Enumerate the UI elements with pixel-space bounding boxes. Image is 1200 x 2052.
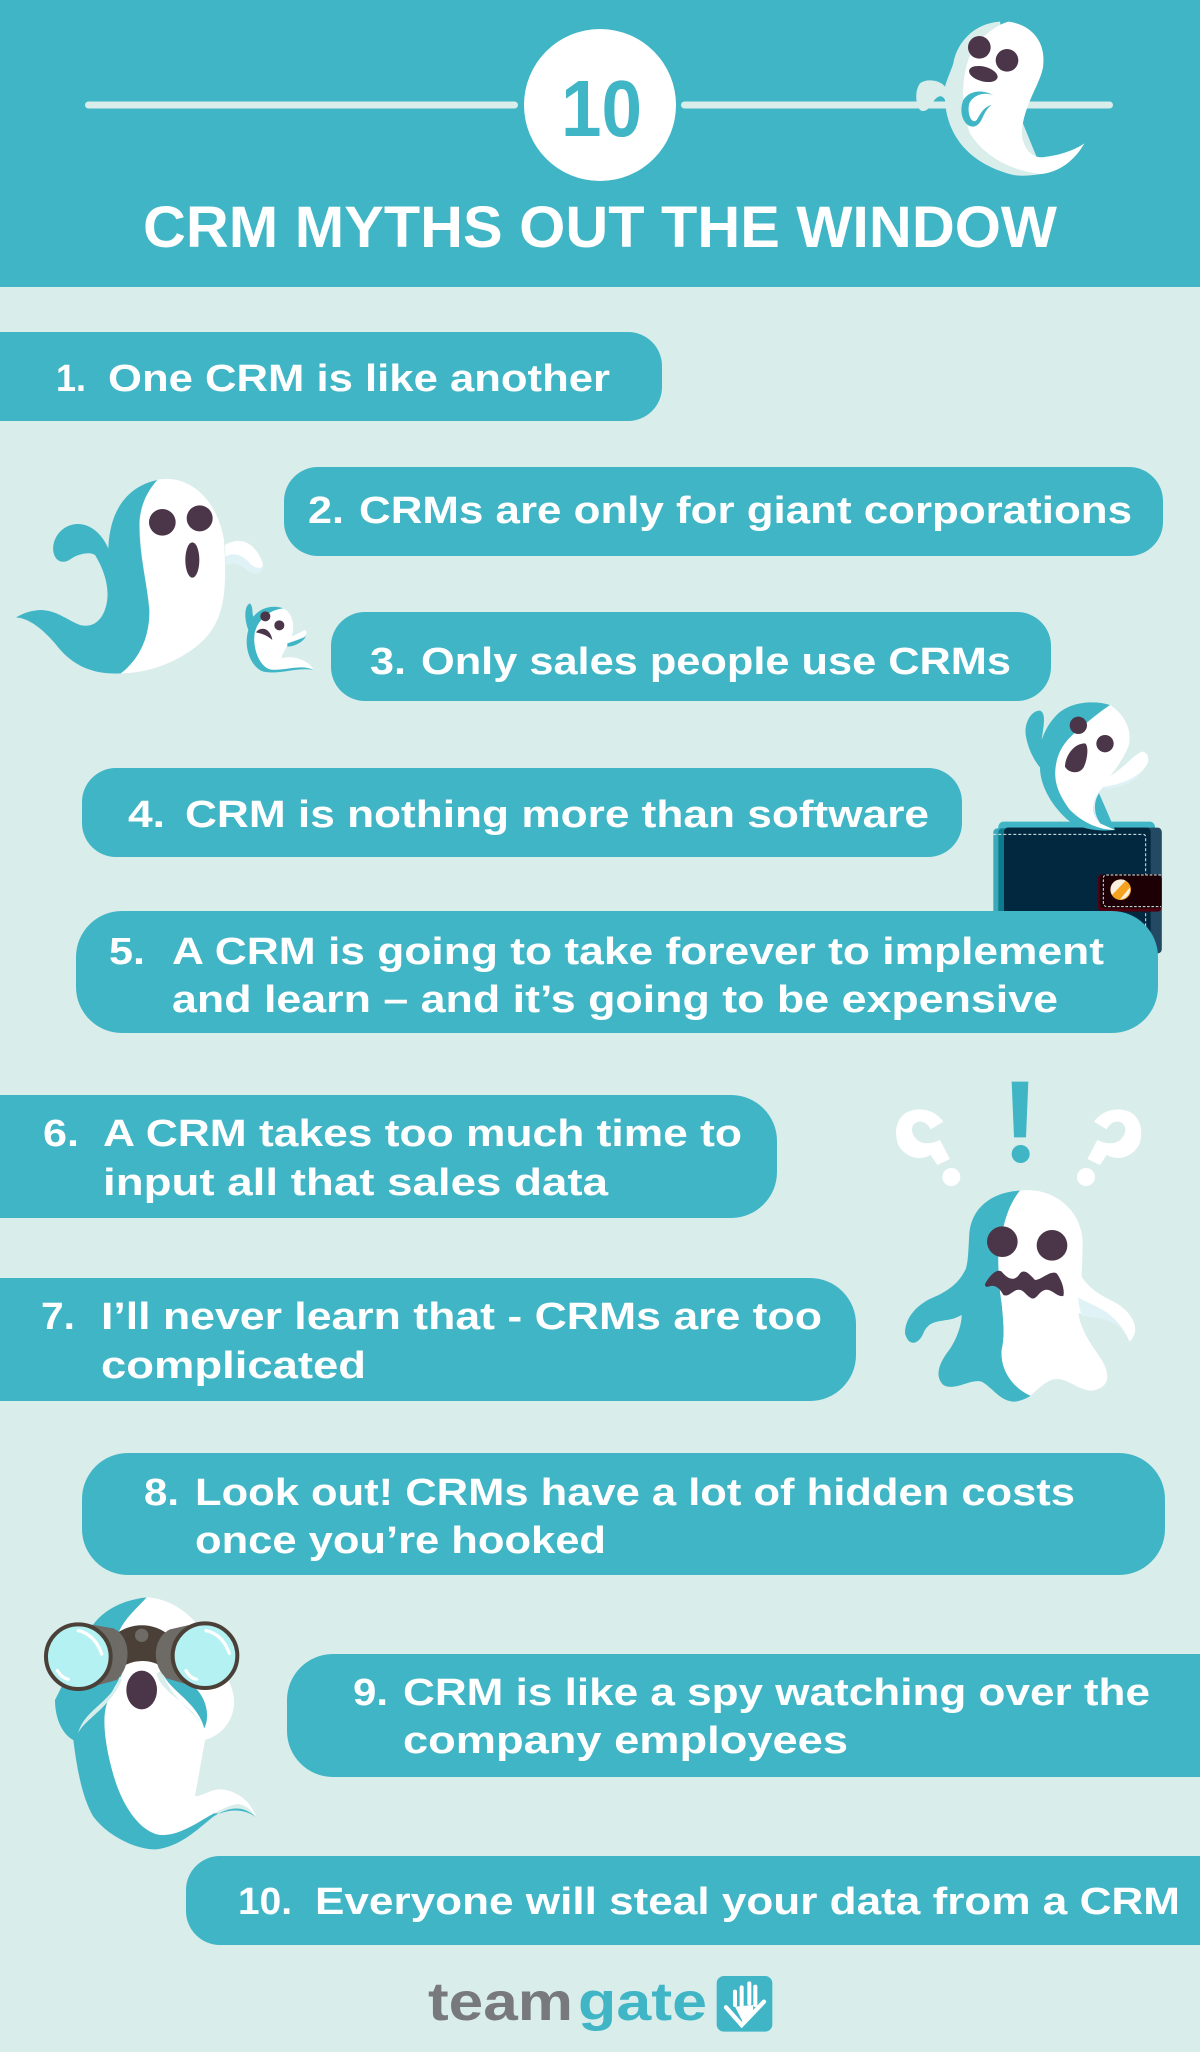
myth 4 (82, 768, 962, 857)
number badge (524, 29, 676, 181)
icon: small ghost (245, 603, 314, 672)
myth 8: Look out! CRMs have a lot of hidden costs (195, 1472, 1075, 1514)
myth 2: CRMs are only for giant corporations (359, 490, 1132, 532)
icon: hand (717, 1976, 772, 2032)
myth 2 (284, 467, 1163, 556)
icon: wallet (993, 822, 1162, 953)
icon: ghost with binoculars (46, 1597, 256, 1849)
myth 9 (287, 1654, 1200, 1777)
myth 5: and learn – and it’s going to be expensive (172, 979, 1058, 1021)
logo: teamgate (428, 1972, 772, 2032)
myth 5 (76, 911, 1158, 1033)
myth 3 (331, 612, 1051, 701)
icon: worried ghost with punctuation (896, 1082, 1141, 1402)
number badge: 10 (561, 64, 642, 153)
myth 10: 10. (238, 1881, 292, 1923)
myth 3: Only sales people use CRMs (421, 641, 1011, 683)
myth 3: 3. (370, 641, 406, 683)
icon: large ghost (16, 479, 263, 673)
myth 10 (186, 1856, 1200, 1945)
myth 6: A CRM takes too much time to (103, 1113, 742, 1155)
myth 7: I’ll never learn that - CRMs are too (101, 1296, 822, 1338)
myth 6: 6. (43, 1113, 79, 1155)
myth 1: One CRM is like another (108, 358, 610, 400)
myth 7 (0, 1278, 856, 1401)
myth 9: CRM is like a spy watching over the (403, 1672, 1150, 1714)
myth 4: 4. (128, 794, 165, 836)
title: CRM MYTHS OUT THE WINDOW (143, 195, 1057, 260)
myth 8 (82, 1453, 1165, 1575)
myth 10: Everyone will steal your data from a CRM (315, 1881, 1180, 1923)
myth 4: CRM is nothing more than software (185, 794, 929, 836)
myth 8: once you’re hooked (195, 1520, 606, 1562)
logo: teamgate: team (428, 1972, 573, 2032)
icon: header ghost (916, 22, 1084, 176)
myth 8: 8. (144, 1472, 179, 1514)
myth 5: 5. (109, 931, 145, 973)
logo: teamgate: gate (578, 1972, 707, 2032)
header banner (0, 0, 1200, 287)
myth 9: company employees (403, 1720, 848, 1762)
myth 2: 2. (308, 490, 344, 532)
myth 5: A CRM is going to take forever to implement (172, 931, 1104, 973)
myth 9: 9. (353, 1672, 388, 1714)
myth 6 (0, 1095, 777, 1218)
myth 1: 1. (56, 358, 86, 400)
myth 6: input all that sales data (103, 1162, 609, 1204)
myth 7: 7. (41, 1296, 75, 1338)
myth 1 (0, 332, 662, 421)
icon: ghost on wallet (1025, 702, 1148, 831)
myth 7: complicated (101, 1345, 366, 1387)
